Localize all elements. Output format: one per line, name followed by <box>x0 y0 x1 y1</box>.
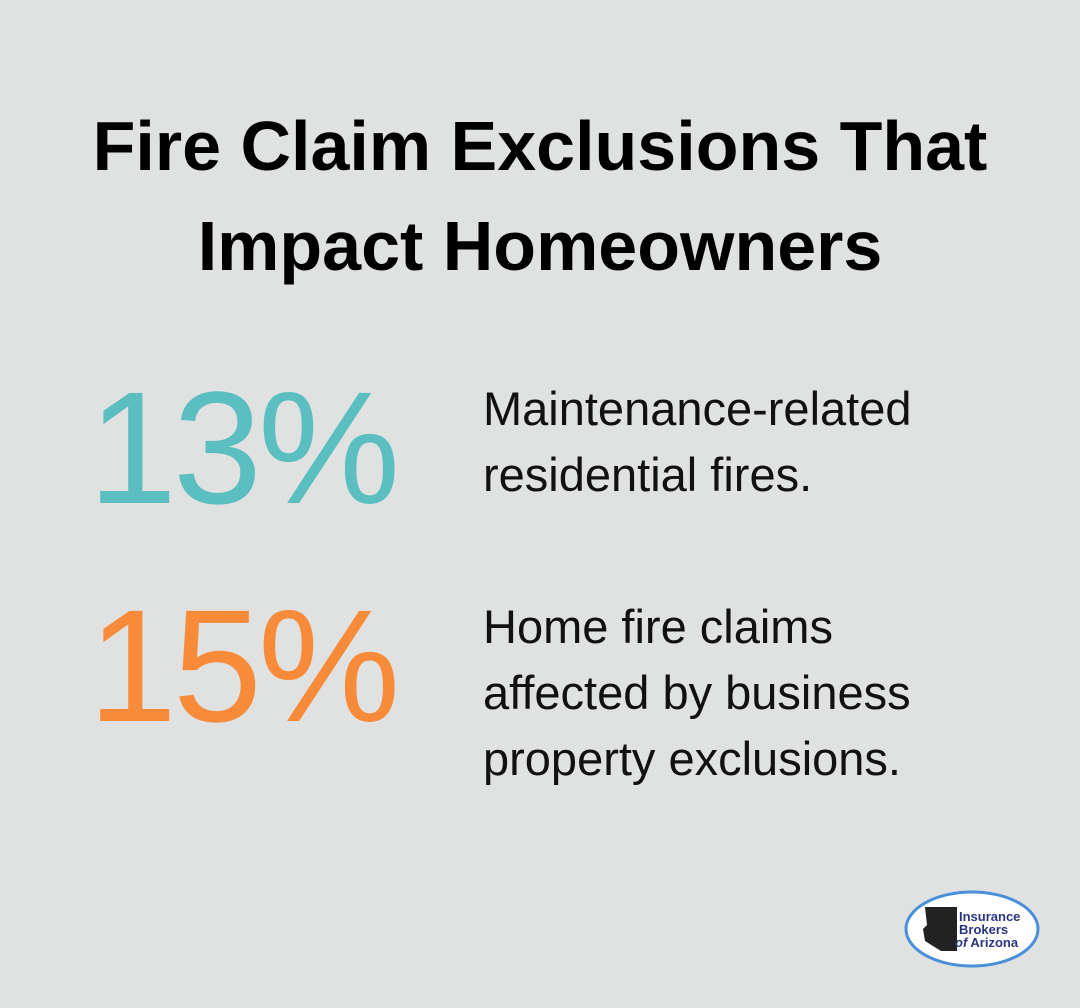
title: Impact Homeowners <box>198 207 882 285</box>
title <box>93 107 987 285</box>
title: Fire Claim Exclusions That <box>93 107 987 185</box>
logo: of Arizona <box>955 935 1019 950</box>
text: 15% description <box>483 600 911 785</box>
text: 13% description: Maintenance-related <box>483 382 912 435</box>
stat: 13%: 13% <box>88 358 396 537</box>
text: 15% description: Home fire claims <box>483 600 833 653</box>
logo: Brokers <box>959 922 1008 937</box>
logo <box>904 890 1040 968</box>
logo: Insurance <box>959 909 1020 924</box>
text: 15% description: property exclusions. <box>483 732 901 785</box>
text: 15% description: affected by business <box>483 666 911 719</box>
text: 13% description: residential fires. <box>483 448 812 501</box>
text: 13% description <box>483 382 912 501</box>
stat: 15%: 15% <box>88 576 396 755</box>
